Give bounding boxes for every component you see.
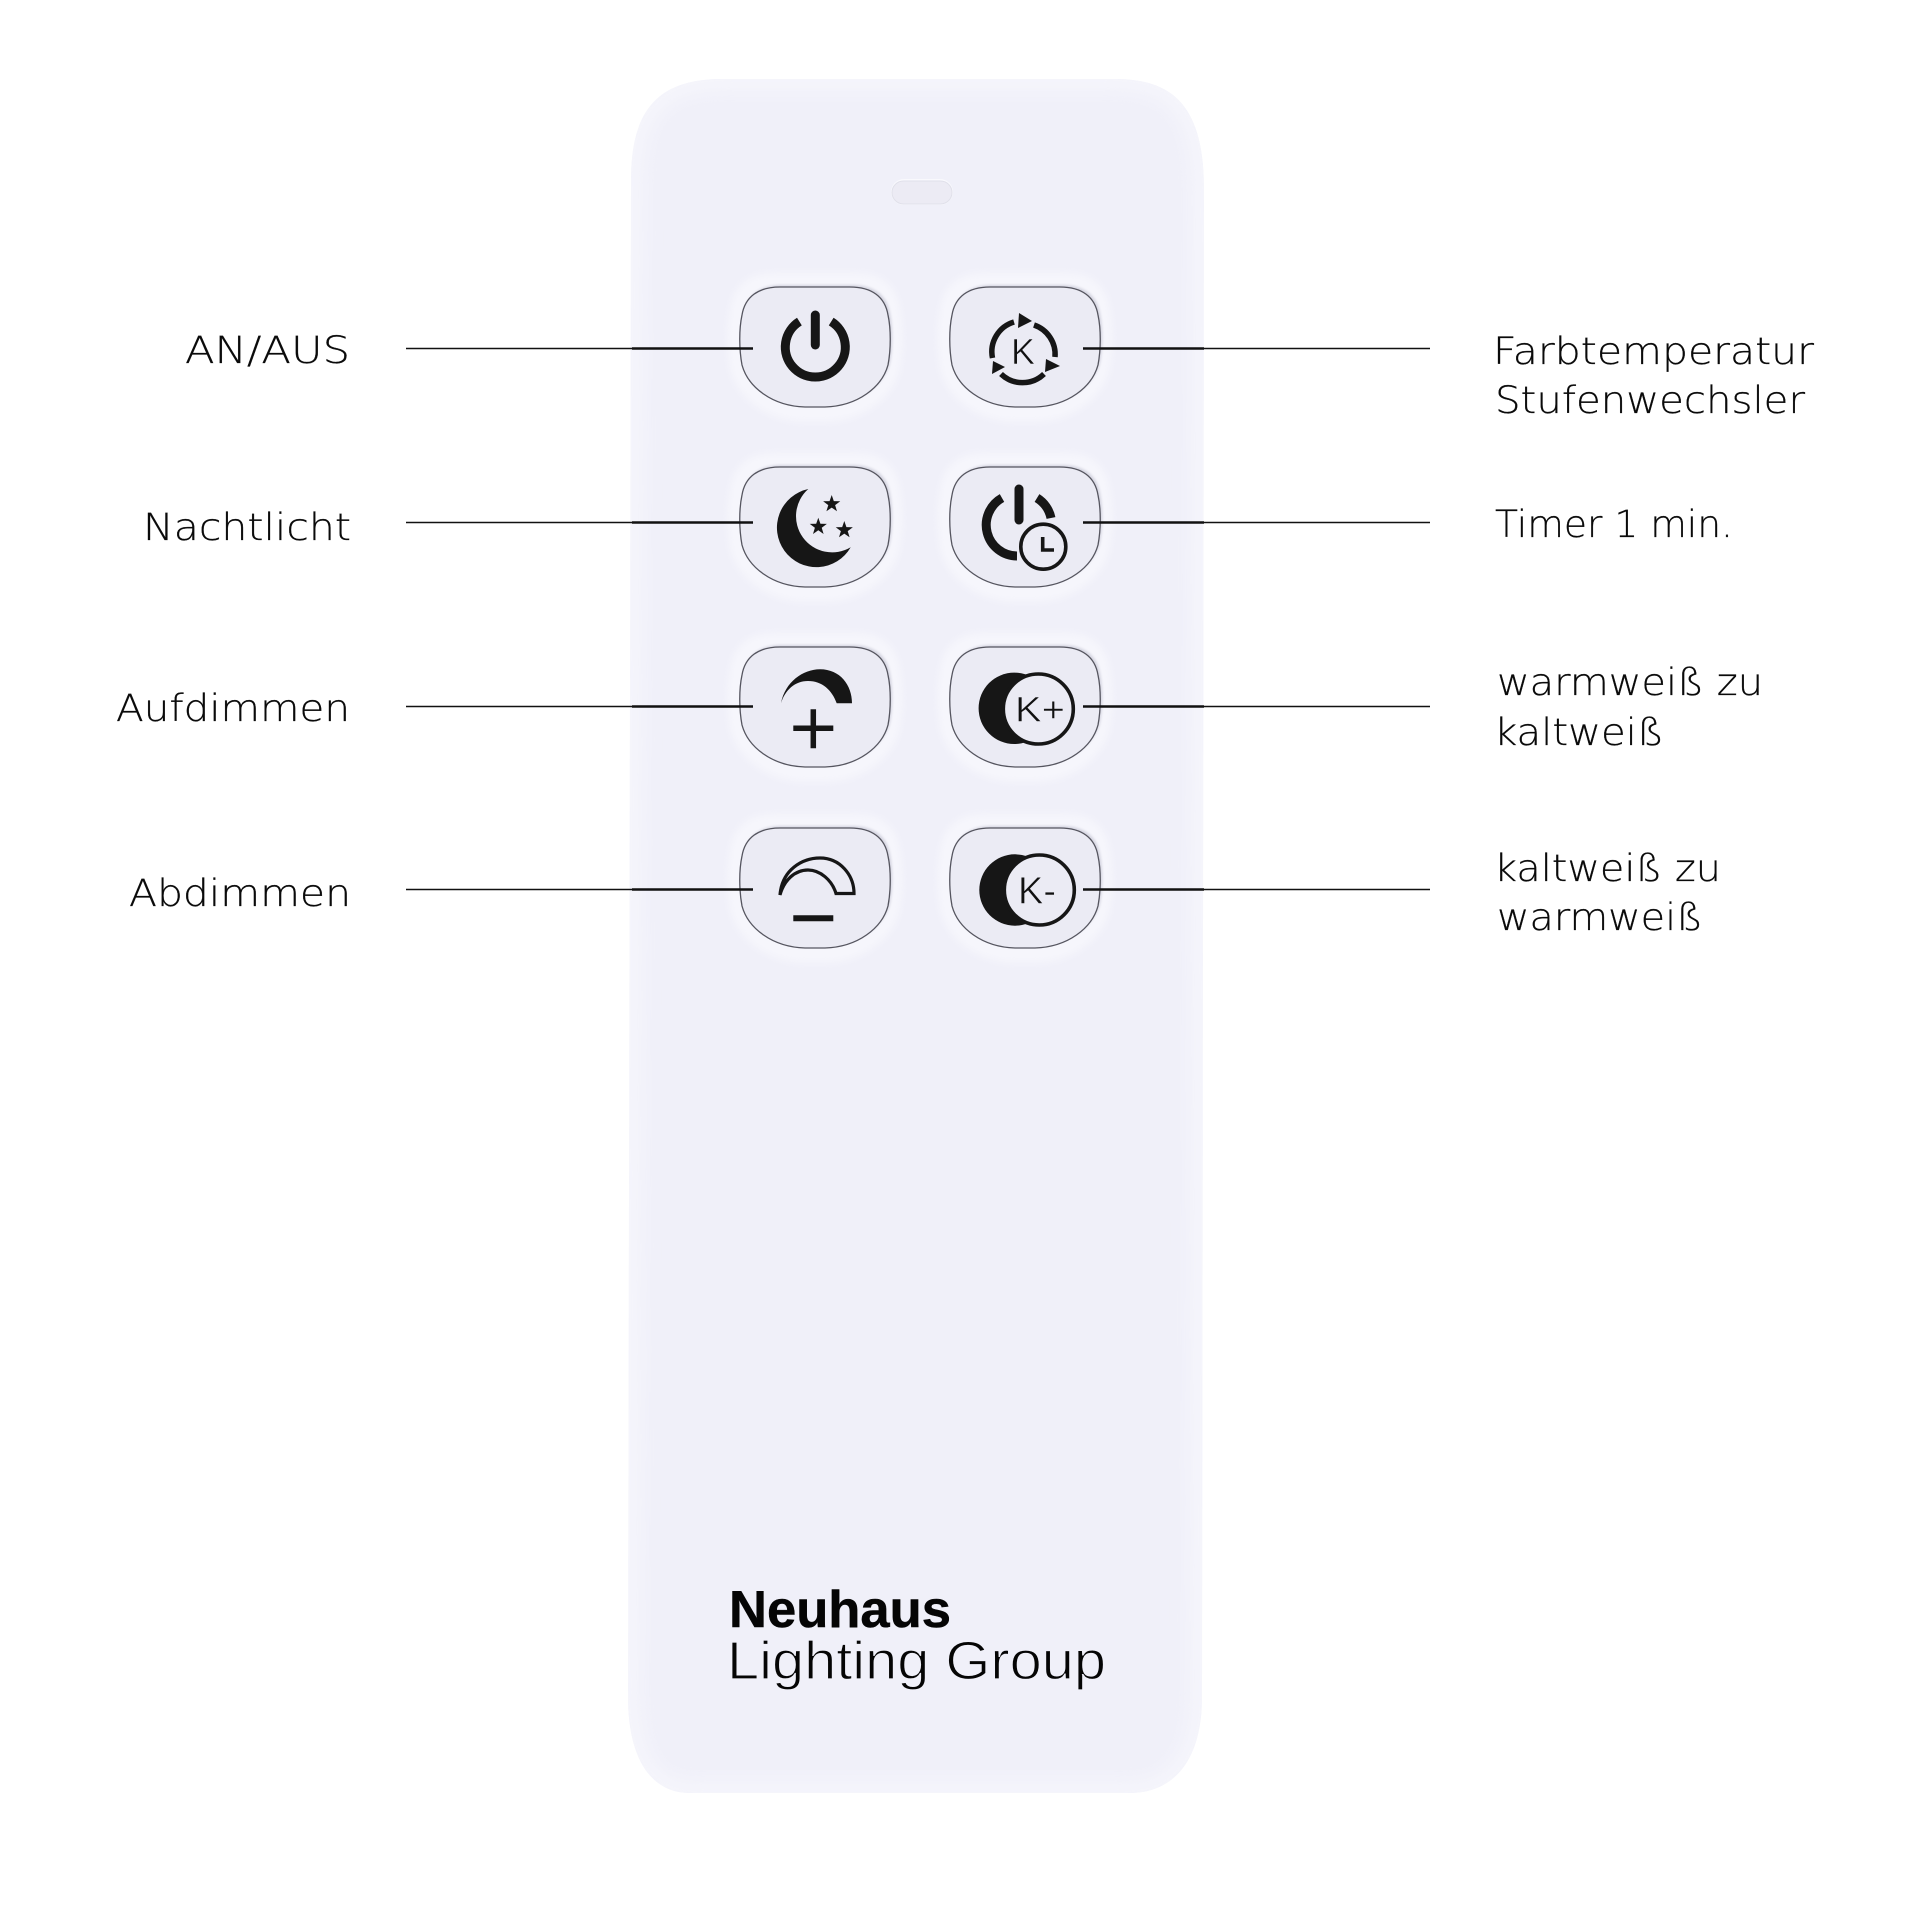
label: kaltweiß zu warmweiß: kaltweiß zu — [1494, 847, 1721, 890]
icon: colour temperature cycle — [992, 313, 1060, 383]
panel: remote control body — [628, 79, 1204, 1793]
label: Timer 1 min.: Timer 1 min. — [1495, 503, 1733, 546]
label: Abdimmen: Abdimmen — [129, 872, 351, 915]
LED indicator — [891, 179, 953, 205]
leader lines: right column — [1083, 348, 1430, 890]
button: kaltweiß zu warmweiß — [938, 814, 1112, 963]
icon: K minus — [979, 854, 1074, 926]
button: Aufdimmen — [728, 633, 902, 782]
label: kaltweiß zu warmweiß — [1494, 847, 1721, 939]
label: warmweiß zu kaltweiß: warmweiß zu — [1497, 661, 1763, 704]
leader lines: left column — [406, 348, 753, 890]
label: Aufdimmen: Aufdimmen — [116, 687, 350, 730]
icon: dim down — [780, 858, 854, 918]
label: Farbtemperatur Stufenwechsler: Stufenwechsler — [1495, 379, 1806, 422]
infographic: remote control with button legend — [117, 79, 1814, 1793]
label: Nachtlicht: Nachtlicht — [143, 506, 351, 549]
icon: K minus: K- — [1018, 870, 1056, 912]
label: Farbtemperatur Stufenwechsler: Farbtemperatur — [1493, 330, 1815, 373]
brand logo: Neuhaus Lighting Group: Neuhaus — [729, 1581, 951, 1639]
label: AN/AUS: AN/AUS — [185, 329, 350, 372]
label: kaltweiß zu warmweiß: warmweiß — [1497, 896, 1703, 939]
icon: power timer — [986, 489, 1066, 569]
button: Nachtlicht — [728, 453, 902, 602]
button: Abdimmen — [728, 814, 902, 963]
label: Farbtemperatur Stufenwechsler — [1493, 330, 1815, 422]
button: Farbtemperatur Stufenwechsler — [938, 273, 1112, 422]
icon: K plus — [979, 673, 1073, 744]
icon: colour temperature cycle: K — [1011, 331, 1035, 372]
button: AN/AUS — [728, 273, 902, 422]
brand logo: Neuhaus Lighting Group: Lighting Group — [727, 1631, 1106, 1691]
icon: moon and stars — [777, 489, 853, 567]
icon: dim up — [781, 669, 852, 748]
icon: K plus: K+ — [1015, 690, 1065, 730]
button: Timer 1 min. — [938, 453, 1112, 602]
label: warmweiß zu kaltweiß: kaltweiß — [1494, 711, 1664, 754]
brand logo: Neuhaus Lighting Group — [727, 1581, 1106, 1691]
button: warmweiß zu kaltweiß — [938, 633, 1112, 782]
label: warmweiß zu kaltweiß — [1494, 661, 1763, 754]
icon: power — [785, 315, 845, 377]
